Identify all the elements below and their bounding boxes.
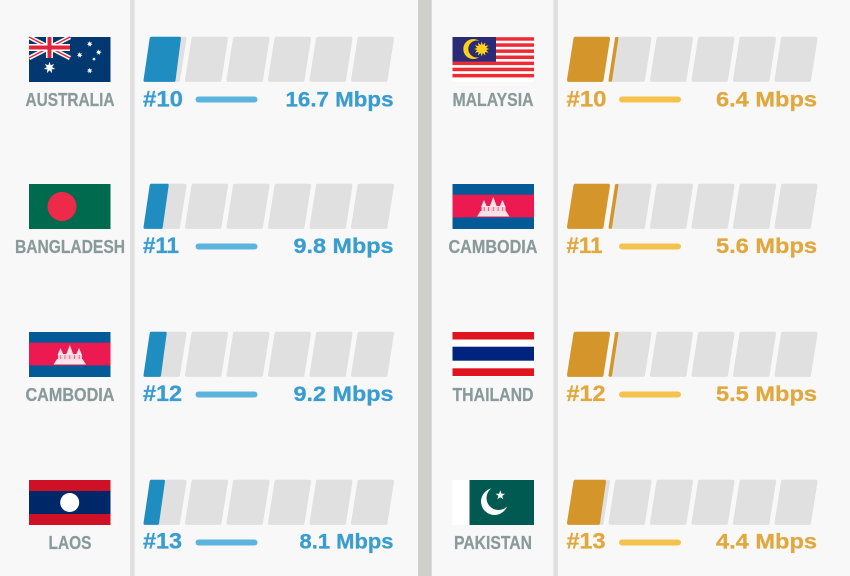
speed bar: 4.4 <box>569 482 816 523</box>
row: Pakistan <box>452 480 817 554</box>
rank: #11 <box>143 233 179 258</box>
line <box>196 96 258 102</box>
line <box>196 244 258 250</box>
line <box>196 540 258 546</box>
rank: #13 <box>143 528 182 554</box>
speed bar: 9.2 <box>145 333 392 375</box>
value: 16.7 Mbps <box>286 88 394 112</box>
divider: left column <box>130 0 134 576</box>
label: Cambodia: CAMBODIA <box>26 385 114 405</box>
value: 6.4 Mbps <box>716 88 817 112</box>
flag: Bangladesh <box>29 184 110 229</box>
rank: #10 <box>566 86 606 112</box>
label: Thailand: THAILAND <box>452 385 534 405</box>
label: Pakistan: PAKISTAN <box>454 533 532 553</box>
rank: #11 <box>566 233 602 258</box>
speed bar: 6.4 <box>569 38 816 81</box>
speed bar: 5.6 <box>569 185 816 228</box>
flag: Cambodia <box>452 184 534 229</box>
row: Bangladesh <box>15 184 394 258</box>
speed bar: 8.1 <box>145 481 392 523</box>
label: Australia: AUSTRALIA <box>26 90 114 110</box>
label: Cambodia: CAMBODIA <box>448 237 538 257</box>
value: 5.6 Mbps <box>716 234 817 258</box>
flag: Australia <box>29 37 110 82</box>
speed bar: 16.7 <box>145 38 392 80</box>
row: Laos <box>29 480 394 554</box>
rank: #10 <box>143 86 183 112</box>
label: Bangladesh: BANGLADESH <box>15 237 125 257</box>
row: Malaysia <box>452 37 817 112</box>
rank: #12 <box>566 381 606 406</box>
flag: Malaysia <box>452 37 534 82</box>
value: 8.1 Mbps <box>300 530 394 554</box>
divider: right column <box>554 0 558 576</box>
row: Cambodia (right) <box>448 184 817 258</box>
speed bar: 5.5 <box>569 333 816 376</box>
flag: Laos <box>29 480 110 525</box>
value: 5.5 Mbps <box>716 382 817 406</box>
rank: #12 <box>143 381 182 406</box>
value: 9.8 Mbps <box>294 234 394 258</box>
flag: Pakistan <box>452 480 534 525</box>
value: 9.2 Mbps <box>294 382 394 406</box>
line <box>619 392 681 398</box>
line <box>619 244 681 250</box>
rank: #13 <box>566 528 606 554</box>
flag: Cambodia <box>29 332 110 377</box>
value: 4.4 Mbps <box>716 530 817 554</box>
speed bar: 9.8 <box>145 185 392 227</box>
line <box>619 540 681 546</box>
row: Cambodia <box>26 332 394 406</box>
row: Thailand <box>452 332 817 406</box>
flag: Thailand <box>452 332 534 377</box>
line <box>196 392 258 398</box>
row: Australia <box>26 37 394 112</box>
label: Malaysia: MALAYSIA <box>452 90 534 110</box>
line <box>619 96 681 102</box>
label: Laos: LAOS <box>48 533 92 553</box>
divider: centre band <box>418 0 432 576</box>
